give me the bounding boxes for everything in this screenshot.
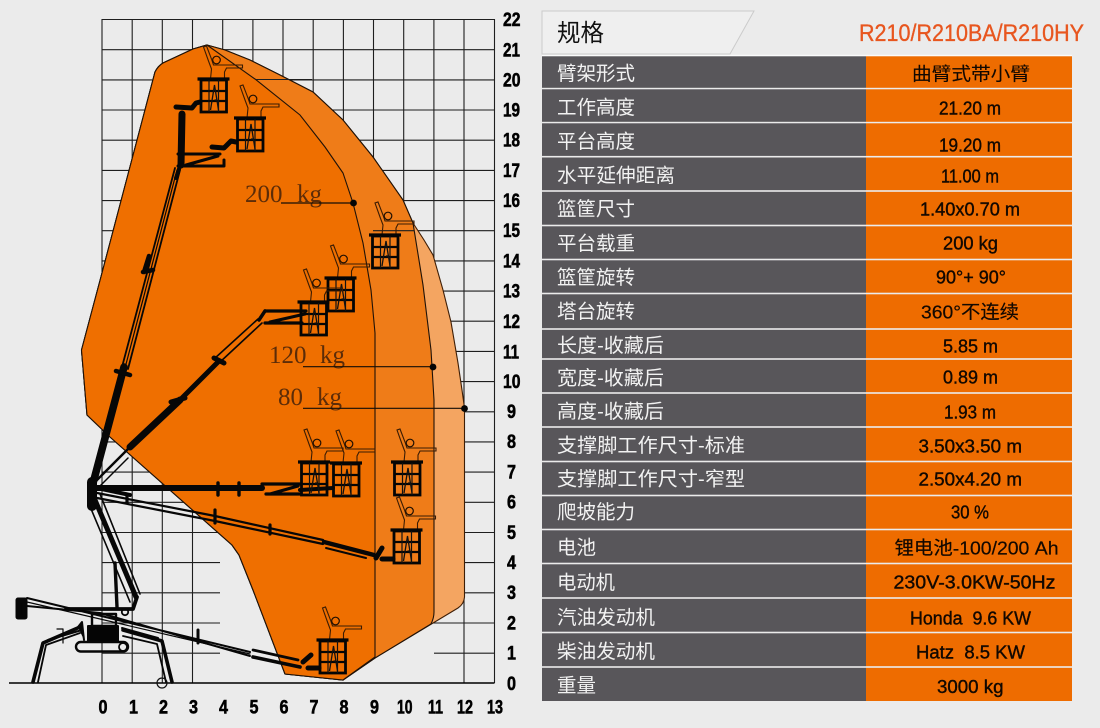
x axis labels: 11 bbox=[428, 698, 443, 718]
label: 120 kg: kg bbox=[320, 342, 346, 369]
lower arm and stowed boom bbox=[18, 482, 319, 668]
row: basket size bbox=[542, 192, 1072, 225]
row: outrigger narrow: 2.50x4.20 m bbox=[918, 468, 1022, 490]
row: boom type: 臂架形式 bbox=[557, 63, 635, 85]
row: gradeability: 爬坡能力 bbox=[557, 502, 635, 524]
row: basket size: 1.40x0.70 m bbox=[920, 198, 1020, 220]
header tab: 规格 bbox=[557, 20, 604, 47]
row: basket rotation bbox=[542, 260, 1072, 293]
grid lines bbox=[102, 19, 494, 683]
row: boom type: 曲臂式带小臂 bbox=[912, 64, 1030, 84]
load chart: working range diagram bbox=[9, 19, 494, 688]
x axis labels: 5 bbox=[250, 698, 259, 718]
x axis labels: 10 bbox=[397, 698, 412, 718]
row: platform load: 平台载重 bbox=[557, 233, 635, 255]
y axis labels: 1 bbox=[507, 644, 516, 664]
y axis labels: 19 bbox=[503, 100, 520, 122]
row: outrigger standard bbox=[542, 428, 1072, 461]
x axis labels: 6 bbox=[280, 698, 288, 718]
y axis labels: 15 bbox=[503, 221, 520, 242]
label: 80 kg: kg bbox=[317, 384, 342, 411]
row: stowed length: 5.85 m bbox=[943, 336, 998, 356]
y axis labels: 10 bbox=[503, 372, 520, 393]
baskets with operators bbox=[198, 46, 436, 673]
row: turret rotation bbox=[542, 294, 1072, 328]
row: electric motor: 230V-3.0KW-50Hz bbox=[894, 572, 1056, 592]
row: battery: 锂电池-100/200 Ah bbox=[894, 538, 1058, 558]
x axis labels: 8 bbox=[340, 698, 348, 718]
row: stowed height bbox=[542, 394, 1072, 426]
row: platform load: 200 kg bbox=[943, 232, 998, 254]
basket 7 m A bbox=[298, 429, 343, 495]
row: stowed width: 0.89 m bbox=[943, 366, 998, 388]
y axis labels bbox=[503, 10, 520, 695]
row: outreach: 水平延伸距离 bbox=[557, 165, 675, 187]
y axis labels: 4 bbox=[507, 553, 516, 574]
x axis labels: 2 bbox=[159, 698, 168, 718]
row: battery bbox=[542, 530, 1072, 563]
y axis labels: 14 bbox=[503, 252, 520, 272]
row: turret rotation: 360°不连续 bbox=[921, 302, 1019, 322]
y axis labels: 18 bbox=[503, 130, 520, 152]
row: working height: 21.20 m bbox=[939, 98, 1001, 118]
label: 200 kg: kg bbox=[297, 181, 322, 208]
basket top 1 bbox=[198, 46, 242, 112]
row: diesel engine bbox=[542, 633, 1072, 666]
x axis labels: 1 bbox=[129, 698, 138, 718]
x axis labels bbox=[98, 698, 503, 718]
envelope: 120 kg zone bbox=[82, 45, 434, 680]
boom: horizontal position bbox=[92, 483, 333, 495]
chassis: outriggers and tracks bbox=[33, 614, 172, 688]
basket 1 m bbox=[316, 607, 362, 673]
x axis labels: 13 bbox=[487, 698, 503, 718]
row: boom type bbox=[542, 56, 1072, 88]
row: outrigger narrow bbox=[542, 462, 1072, 495]
row: working height: 工作高度 bbox=[557, 97, 635, 119]
y axis labels: 17 bbox=[503, 161, 520, 182]
row: outrigger standard: 支撑脚工作尺寸-标准 bbox=[557, 435, 745, 457]
row: outrigger narrow: 支撑脚工作尺寸-窄型 bbox=[557, 468, 745, 490]
ground line bbox=[9, 682, 494, 684]
x axis labels: 0 bbox=[98, 698, 108, 718]
row: basket size: 篮筐尺寸 bbox=[557, 198, 635, 220]
spec table bbox=[542, 55, 1072, 701]
y axis labels: 2 bbox=[507, 614, 516, 634]
y axis labels: 12 bbox=[503, 312, 520, 333]
row: turret rotation: 塔台旋转 bbox=[557, 301, 635, 323]
basket 7 m B bbox=[330, 430, 375, 496]
y axis labels: 13 bbox=[503, 282, 520, 302]
row: battery: 电池 bbox=[557, 537, 596, 559]
y axis labels: 3 bbox=[507, 583, 516, 604]
basket top 2 bbox=[234, 85, 279, 151]
y axis labels: 8 bbox=[507, 432, 516, 453]
row: platform height: 平台高度 bbox=[557, 131, 635, 153]
label: 200 kg bbox=[245, 181, 357, 208]
row: stowed width bbox=[542, 360, 1072, 392]
row: working height bbox=[542, 89, 1072, 122]
row: platform height bbox=[542, 123, 1072, 156]
row: platform load bbox=[542, 226, 1072, 259]
row: electric motor bbox=[542, 564, 1072, 597]
boom: slightly lowered position bbox=[92, 487, 393, 559]
row: stowed length bbox=[542, 330, 1072, 358]
y axis labels: 9 bbox=[507, 402, 516, 423]
row: stowed height: 高度-收藏后 bbox=[557, 401, 664, 423]
basket 12 m bbox=[298, 269, 342, 335]
y axis labels: 0 bbox=[507, 674, 516, 695]
y axis labels: 20 bbox=[503, 70, 520, 92]
boom: mid position bbox=[92, 311, 306, 486]
basket 13 m bbox=[324, 245, 370, 311]
row: outrigger standard: 3.50x3.50 m bbox=[918, 436, 1022, 456]
basket 5 m bbox=[390, 497, 436, 563]
x axis labels: 3 bbox=[189, 698, 198, 718]
row: petrol engine: Honda 9.6 KW bbox=[910, 608, 1032, 628]
boom: fully raised position bbox=[92, 102, 236, 487]
basket 7 m C bbox=[391, 429, 436, 495]
y axis labels: 22 bbox=[503, 10, 520, 31]
row: outreach bbox=[542, 158, 1072, 190]
row: diesel engine: 柴油发动机 bbox=[557, 641, 655, 663]
envelope: 80 kg zone bbox=[82, 45, 464, 680]
x axis labels: 7 bbox=[310, 698, 318, 718]
row: diesel engine: Hatz 8.5 KW bbox=[916, 642, 1026, 662]
y axis labels: 5 bbox=[507, 523, 516, 544]
header tab bbox=[542, 11, 754, 54]
row: petrol engine bbox=[542, 599, 1072, 632]
row: basket rotation: 90°+ 90° bbox=[936, 266, 1006, 288]
y axis labels: 16 bbox=[503, 191, 520, 212]
row: platform height: 19.20 m bbox=[939, 134, 1001, 156]
row: petrol engine: 汽油发动机 bbox=[557, 607, 655, 629]
label: 80 kg: 80 bbox=[278, 384, 303, 411]
basket outer 15 m bbox=[369, 202, 414, 268]
row: stowed length: 长度-收藏后 bbox=[557, 335, 664, 357]
label: 120 kg bbox=[269, 342, 436, 370]
row: electric motor: 电动机 bbox=[557, 572, 615, 594]
x axis labels: 9 bbox=[370, 698, 379, 718]
envelope: 200 kg zone bbox=[82, 45, 375, 680]
x axis labels: 4 bbox=[219, 698, 228, 718]
y axis labels: 7 bbox=[507, 462, 516, 484]
row: stowed width: 宽度-收藏后 bbox=[557, 368, 664, 390]
x axis labels: 12 bbox=[457, 698, 473, 718]
y axis labels: 11 bbox=[503, 342, 519, 364]
row: stowed height: 1.93 m bbox=[944, 402, 996, 422]
row: weight bbox=[542, 668, 1072, 701]
y axis labels: 21 bbox=[503, 40, 520, 62]
label: 200 kg: 200 bbox=[245, 181, 282, 208]
row: weight: 3000 kg bbox=[937, 676, 1004, 697]
y axis labels: 6 bbox=[507, 492, 516, 514]
row: gradeability bbox=[542, 496, 1072, 529]
row: gradeability: 30 % bbox=[951, 502, 989, 522]
row: outreach: 11.00 m bbox=[941, 166, 999, 186]
row: weight: 重量 bbox=[557, 675, 596, 697]
label: 120 kg: 120 bbox=[269, 342, 306, 369]
grid remnants over zones bbox=[255, 80, 414, 231]
row: basket rotation: 篮筐旋转 bbox=[557, 267, 635, 289]
label: 80 kg bbox=[278, 384, 468, 412]
